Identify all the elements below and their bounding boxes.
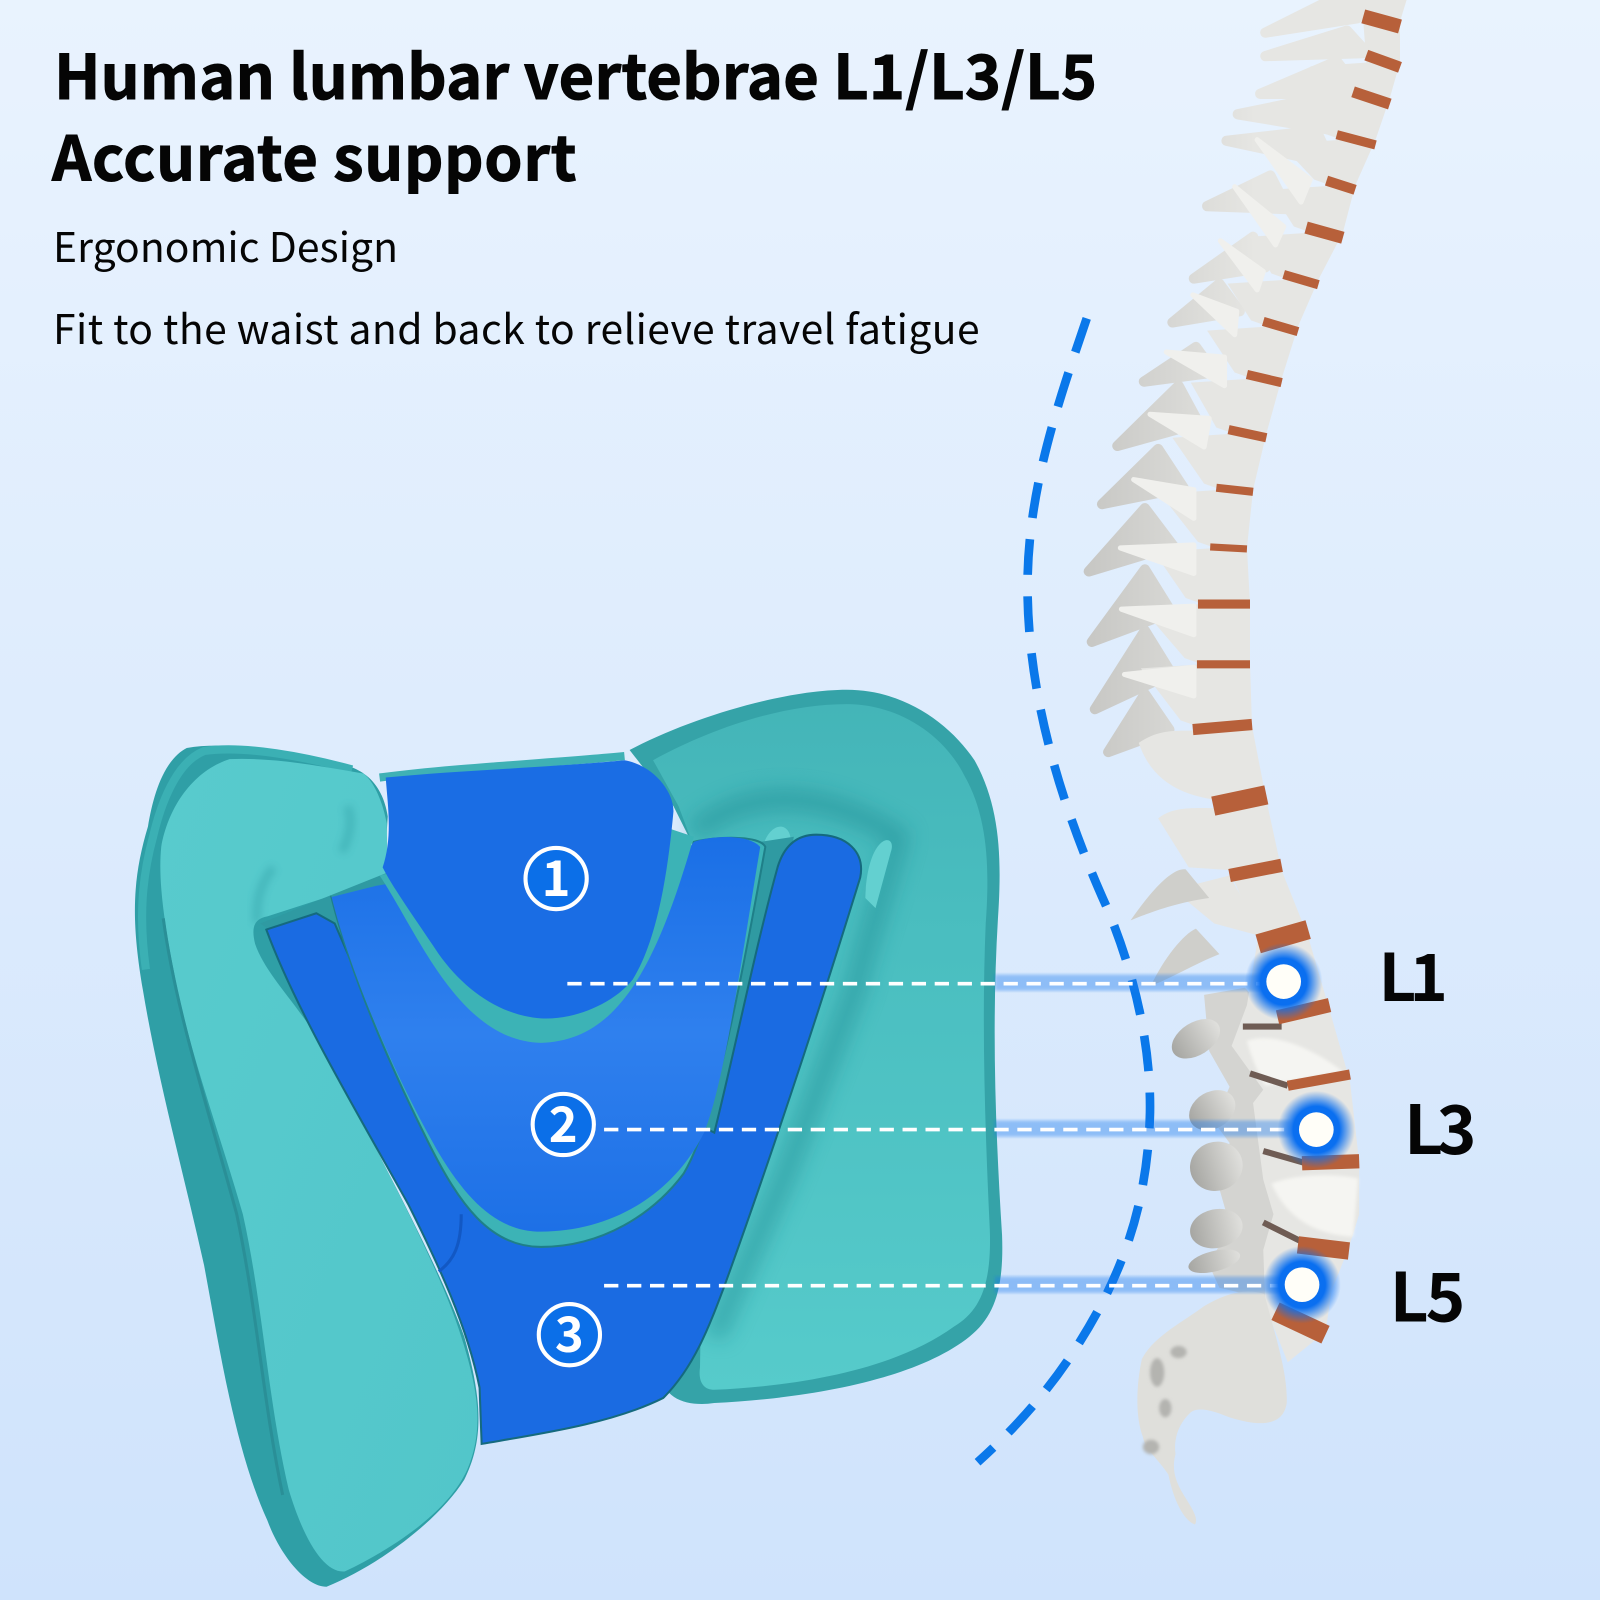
- subtitle: fit description: Fit to the waist and back to relieve travel fatigue: [53, 297, 980, 356]
- dark disc extensions: [1243, 1027, 1306, 1241]
- label L5: L5: [1390, 1244, 1465, 1341]
- channel gap fill: [260, 837, 794, 1158]
- right lobe inner shadow: [694, 800, 898, 1337]
- dashed spine curve arc: [978, 318, 1150, 1462]
- left lobe: [135, 746, 794, 1587]
- point L3: [1278, 1091, 1355, 1168]
- connector L1: [567, 974, 1265, 991]
- vertebral column: [1193, 0, 1408, 1362]
- marker 1: 1: [542, 840, 571, 911]
- vertebra wings: [1131, 62, 1371, 986]
- connector L5: [604, 1277, 1296, 1293]
- intervertebral discs: [1193, 16, 1400, 1335]
- label L1: L1: [1379, 925, 1448, 1020]
- lumbar posterior mass: [1204, 988, 1276, 1301]
- left lobe fold shading: [257, 806, 350, 923]
- left lobe crinkled edge: [142, 749, 352, 969]
- sacrum holes: [1143, 1346, 1187, 1454]
- left lobe seam: [163, 918, 283, 1495]
- marker 2: [533, 1086, 594, 1157]
- marker 1: [526, 840, 587, 911]
- right lobe fingers: [760, 827, 892, 918]
- title: [51, 28, 1097, 199]
- marker 2: 2: [549, 1086, 578, 1157]
- seat cushion: [135, 690, 1002, 1587]
- spinal processes: rear spikes: [1089, 2, 1367, 752]
- lumbar processes: [1165, 1011, 1249, 1278]
- blue channel 2: [332, 837, 765, 1247]
- title: Human lumbar vertebrae L1/L3/L5: [54, 28, 1097, 117]
- subtitle: ergonomic design: Ergonomic Design: [53, 215, 398, 274]
- channel 3 lower fold: [439, 1214, 461, 1271]
- thoracic ridges: [1120, 140, 1310, 696]
- blue channel 3: [266, 835, 861, 1444]
- marker 3: 3: [555, 1296, 584, 1367]
- marker 3: [539, 1296, 600, 1367]
- blue panel 1: [380, 756, 694, 1043]
- title: Accurate support: [51, 110, 577, 199]
- point L1: [1245, 943, 1322, 1020]
- label L3: L3: [1404, 1077, 1477, 1174]
- connector L3: [604, 1120, 1301, 1137]
- spine illustration: [1089, 0, 1408, 1524]
- point L5: [1263, 1246, 1341, 1323]
- right lobe: [630, 690, 1002, 1404]
- lumbar body highlights: [1247, 1038, 1358, 1237]
- sacrum: [1137, 1291, 1287, 1524]
